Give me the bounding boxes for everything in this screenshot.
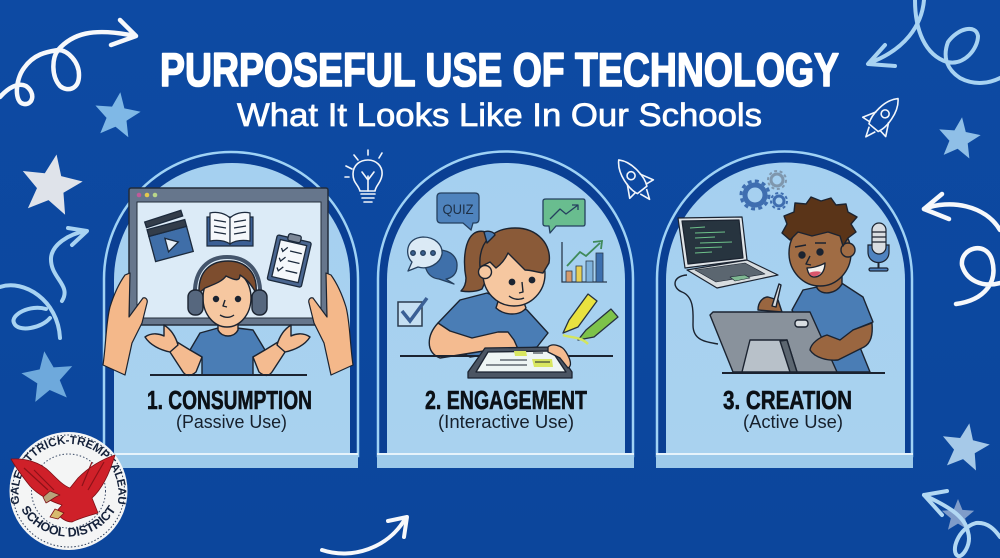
icon: rocket top right bbox=[854, 89, 909, 146]
decorative arrow: top right bbox=[868, 0, 1000, 83]
icon: video clapperboard bbox=[144, 210, 193, 262]
label: creation bbox=[723, 385, 852, 432]
drawing tablet bbox=[710, 312, 837, 372]
icon: microphone bbox=[868, 223, 889, 271]
star: bottom right bbox=[938, 419, 993, 472]
icon: bar chart bbox=[562, 241, 607, 282]
decorative swirl: left bbox=[0, 285, 60, 338]
icon: laptop with code bbox=[678, 217, 778, 288]
logo text: GALE-ETTRICK-TREMPEALEAU bbox=[10, 436, 126, 504]
star: blue bbox=[19, 348, 76, 403]
label: creation: 3. CREATION bbox=[723, 385, 852, 415]
label: consumption: (Passive Use) bbox=[176, 412, 287, 432]
girl student bbox=[429, 228, 549, 358]
star: top right bbox=[936, 114, 983, 160]
icon: clipboard checklist bbox=[267, 231, 312, 287]
icon: highlighters bbox=[563, 294, 618, 344]
label: engagement bbox=[425, 385, 587, 432]
label: creation: (Active Use) bbox=[743, 412, 843, 432]
panel: engagement bbox=[377, 152, 634, 468]
decorative arrow: left curved bbox=[51, 228, 87, 301]
tablet bbox=[468, 345, 572, 378]
decorative arrow: bottom centre bbox=[322, 517, 407, 553]
icon: lightbulb bbox=[345, 150, 382, 202]
label: consumption: 1. CONSUMPTION bbox=[147, 385, 312, 415]
table line bbox=[150, 374, 307, 376]
child with headphones bbox=[145, 257, 310, 375]
label: engagement: (Interactive Use) bbox=[438, 412, 574, 432]
panel: consumption bbox=[103, 152, 358, 468]
monitor bbox=[129, 188, 328, 325]
icon: quiz bubble: QUIZ bbox=[442, 201, 474, 217]
icon: green chart bubble bbox=[543, 199, 585, 233]
hands holding monitor bbox=[103, 273, 353, 375]
subtitle: What It Looks Like In Our Schools bbox=[237, 97, 762, 133]
star: light blue bbox=[92, 89, 143, 138]
decorative arrow: top left swirl bbox=[0, 20, 136, 104]
logo lower text: SCHOOL DISTRICT bbox=[22, 504, 114, 537]
faint star: bottom right corner bbox=[942, 499, 974, 530]
icon: gears bbox=[741, 171, 787, 209]
icon: red eagle bbox=[11, 455, 115, 522]
icon: rocket centre bbox=[607, 151, 661, 209]
panel: creation bbox=[656, 152, 913, 468]
icon: open book bbox=[207, 212, 253, 246]
cable bbox=[675, 275, 718, 344]
label: consumption bbox=[147, 385, 312, 432]
icon: checkbox bbox=[398, 298, 427, 326]
table line bbox=[400, 355, 613, 357]
decorative arrow: right bbox=[924, 194, 1000, 304]
table line bbox=[722, 372, 885, 374]
boy forearm and hand bbox=[810, 323, 872, 360]
icon: chat bubbles bbox=[408, 237, 457, 284]
title: PURPOSEFUL USE OF TECHNOLOGY bbox=[160, 43, 839, 96]
decorative arrow: bottom right bbox=[924, 491, 1000, 556]
logo: school district seal bbox=[10, 432, 128, 550]
icon: quiz bubble bbox=[437, 193, 479, 230]
boy student bbox=[758, 197, 873, 372]
star: white bbox=[17, 149, 86, 217]
label: engagement: 2. ENGAGEMENT bbox=[425, 385, 587, 415]
